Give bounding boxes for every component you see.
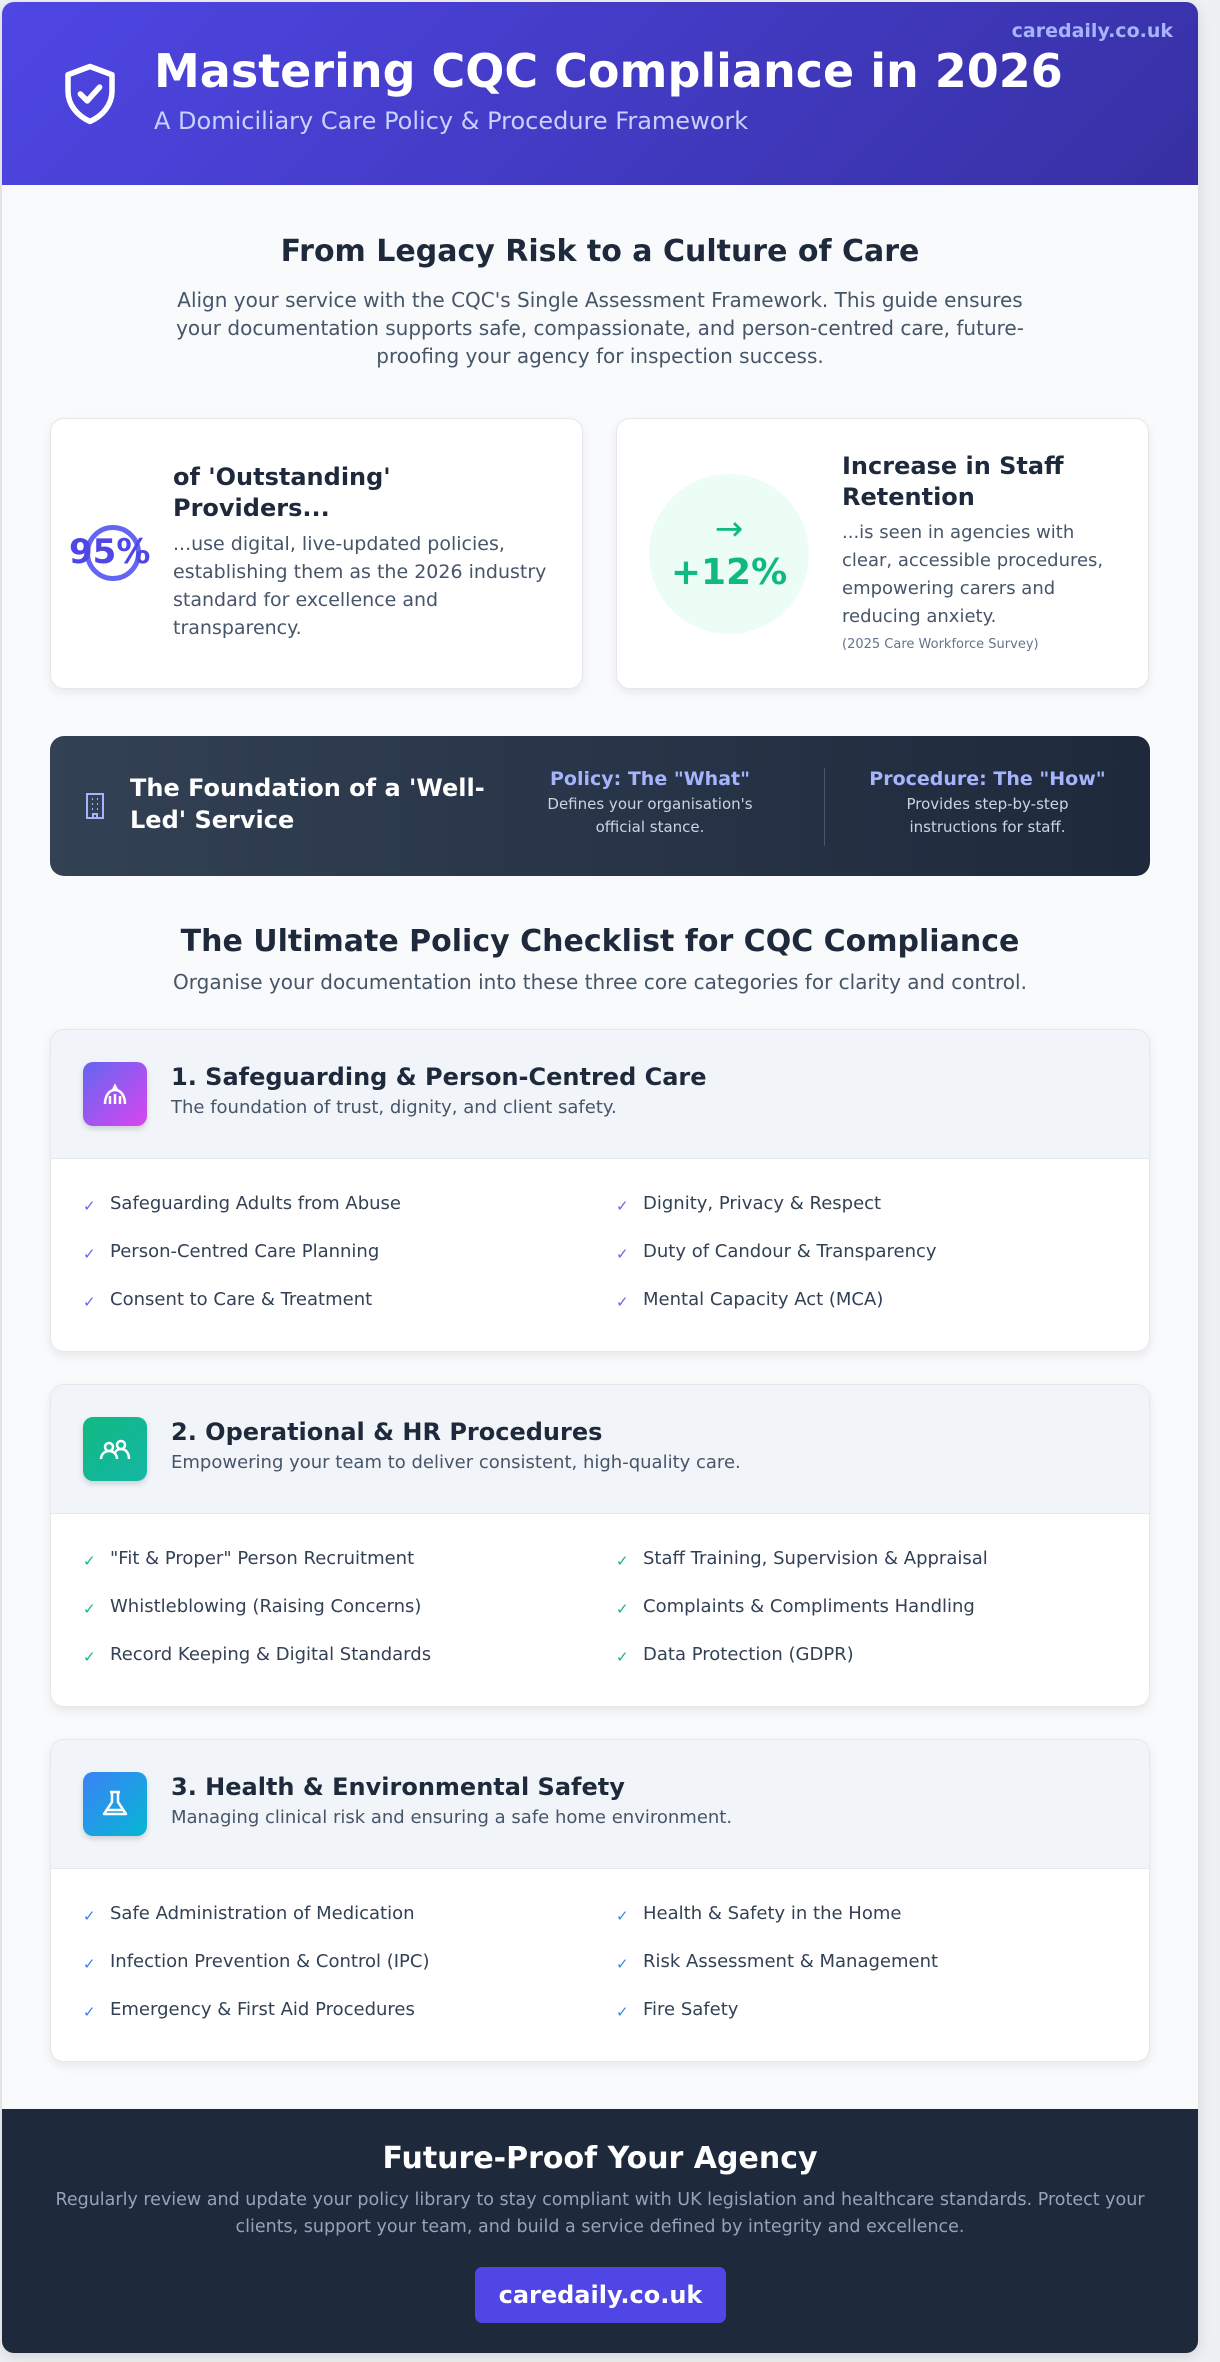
source: (2025 Care Workforce Survey) [842,637,1039,652]
checklist items: Fire Safety [643,1999,738,2020]
checklist items: ✓ [83,1293,96,1311]
checklist items: ✓ [616,1600,629,1618]
checklist items: Safeguarding Adults from Abuse [110,1193,401,1214]
checklist items: ✓ [616,1552,629,1570]
checklist items: ✓ [83,1955,96,1973]
checklist items: Data Protection (GDPR) [643,1644,854,1665]
panel: health & safety: Managing clinical risk and ensuring a safe home environment. [171,1807,732,1828]
stat text: ...use digital, live-updated policies, establishing them as the 2026 industry standard for excellence and transparency. [173,533,546,639]
checklist items [83,1193,937,1311]
stat heading: Retention [842,483,975,511]
checklist items: Risk Assessment & Management [643,1951,938,1972]
stat heading: Providers... [173,494,330,522]
checklist items: Consent to Care & Treatment [110,1289,372,1310]
stat ring 95% [85,525,141,581]
intro text: Align your service with the CQC's Single Assessment Framework. This guide ensures your documentation supports safe, compassionate, and person-centred care, future-proofing your agency for inspection success. [176,288,1024,368]
checklist subheading: Organise your documentation into these three core categories for clarity and control. [173,970,1027,994]
footer [2,2109,1198,2353]
stat card: +12% [616,418,1149,689]
CTA button: caredaily.co.uk [499,2281,702,2309]
footer text: Regularly review and update your policy library to stay compliant with UK legislation and healthcare standards. Protect your clients, support your team, and build a service defined by integrity and excellence. [55,2190,1145,2237]
checklist items: ✓ [83,1197,96,1215]
icon: team [83,1417,147,1481]
checklist items: Safe Administration of Medication [110,1903,415,1924]
checklist items: ✓ [616,1197,629,1215]
stat circle: +12% [671,552,787,593]
stat circle: → [715,509,743,549]
checklist items: Emergency & First Aid Procedures [110,1999,415,2020]
checklist items: Duty of Candour & Transparency [643,1241,937,1262]
policy column [547,768,753,836]
checklist items: ✓ [616,2003,629,2021]
checklist items [83,1903,938,2021]
policy column: Policy: The "What" [550,768,750,790]
checklist items: Health & Safety in the Home [643,1903,901,1924]
stat text: ...is seen in agencies with clear, accessible procedures, empowering carers and reducing anxiety. [842,522,1103,627]
stat heading [842,452,1064,511]
checklist items: ✓ [83,1245,96,1263]
stat circle [649,474,809,634]
checklist items: ✓ [83,1552,96,1570]
panel: safeguarding: 1. Safeguarding & Person-Centred Care [171,1063,707,1091]
CTA button [475,2267,726,2323]
panel: operational [50,1384,1150,1707]
subtitle: A Domiciliary Care Policy & Procedure Framework [154,107,748,135]
policy column: Defines your organisation's [547,795,753,813]
panel: operational: 2. Operational & HR Procedures [171,1418,602,1446]
procedure column: Provides step-by-step [906,795,1069,813]
title: Mastering CQC Compliance in 2026 [154,44,1063,98]
stat heading: Increase in Staff [842,452,1064,480]
stat card: 95%: 95% [69,532,150,572]
procedure column: instructions for staff. [910,818,1066,836]
procedure column [869,768,1106,836]
header banner [2,2,1198,185]
procedure column: Procedure: The "How" [869,768,1106,790]
intro heading: From Legacy Risk to a Culture of Care [281,234,919,269]
panel: health & safety [50,1739,1150,2062]
checklist items: Whistleblowing (Raising Concerns) [110,1596,421,1617]
checklist items: Mental Capacity Act (MCA) [643,1289,883,1310]
brand tag: caredaily.co.uk [1012,20,1173,42]
icon: building [86,793,104,819]
checklist items: ✓ [616,1955,629,1973]
checklist items: ✓ [616,1648,629,1666]
checklist heading: The Ultimate Policy Checklist for CQC Compliance [181,924,1019,959]
checklist items: ✓ [83,1600,96,1618]
checklist items: Complaints & Compliments Handling [643,1596,975,1617]
policy column: official stance. [596,818,704,836]
icon: hands [83,1062,147,1126]
panel: safeguarding: The foundation of trust, dignity, and client safety. [171,1097,617,1118]
checklist items: "Fit & Proper" Person Recruitment [110,1548,414,1569]
band heading: The Foundation of a 'Well-Led' Service [130,774,485,834]
icon: flask [83,1772,147,1836]
checklist items: ✓ [616,1293,629,1311]
checklist items: ✓ [83,1648,96,1666]
checklist items: Dignity, Privacy & Respect [643,1193,881,1214]
panel: safeguarding [50,1029,1150,1352]
checklist items: Person-Centred Care Planning [110,1241,379,1262]
checklist items: Staff Training, Supervision & Appraisal [643,1548,988,1569]
stat heading: of 'Outstanding' [173,463,391,491]
checklist items: ✓ [83,2003,96,2021]
checklist items: Record Keeping & Digital Standards [110,1644,431,1665]
footer heading: Future-Proof Your Agency [382,2141,818,2176]
panel: operational: Empowering your team to deliver consistent, high-quality care. [171,1452,741,1473]
stat card: 95% [50,418,583,689]
panel: health & safety: 3. Health & Environmental Safety [171,1773,625,1801]
dark band: policy vs procedure [50,736,1150,876]
stat heading [173,463,391,522]
checklist items: ✓ [83,1907,96,1925]
checklist items: Infection Prevention & Control (IPC) [110,1951,430,1972]
checklist items: ✓ [616,1907,629,1925]
checklist items: ✓ [616,1245,629,1263]
checklist items [83,1548,988,1666]
icon: shield [65,64,115,124]
